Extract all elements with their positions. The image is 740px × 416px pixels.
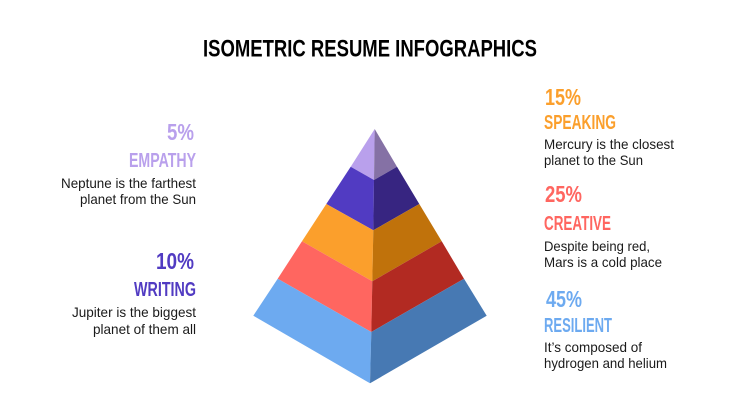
pyramid tier: creative xyxy=(278,241,464,332)
text block: writing 10%: planet of them all xyxy=(93,321,196,337)
pyramid tier: writing xyxy=(326,167,419,230)
text block: empathy 5% xyxy=(61,119,196,207)
text block: writing 10%: WRITING xyxy=(134,279,196,301)
text block: empathy 5%: Neptune is the farthest xyxy=(61,175,196,191)
text block: speaking 15%: Mercury is the closest xyxy=(544,136,674,152)
text block: writing 10%: 10% xyxy=(156,248,194,274)
pyramid tier: speaking xyxy=(302,204,442,281)
text block: creative 25%: 25% xyxy=(545,181,582,207)
text block: creative 25%: Despite being red, xyxy=(544,238,650,254)
text block: creative 25% xyxy=(544,181,662,270)
text block: creative 25%: Mars is a cold place xyxy=(544,254,662,270)
text block: writing 10%: Jupiter is the biggest xyxy=(72,304,196,320)
text block: resilient 45%: RESILIENT xyxy=(544,315,612,337)
text block: resilient 45%: 45% xyxy=(546,286,582,312)
text block: creative 25%: CREATIVE xyxy=(544,213,611,235)
text block: speaking 15% xyxy=(544,84,674,168)
pyramid tier: resilient xyxy=(253,279,487,383)
text block: writing 10% xyxy=(72,248,196,337)
text block: empathy 5%: planet from the Sun xyxy=(80,191,196,207)
text block: speaking 15%: planet to the Sun xyxy=(544,152,643,168)
text block: empathy 5%: 5% xyxy=(167,119,194,145)
text block: empathy 5%: EMPATHY xyxy=(129,150,196,172)
text block: speaking 15%: 15% xyxy=(545,84,581,110)
text block: resilient 45%: hydrogen and helium xyxy=(544,355,667,371)
pyramid tier: empathy xyxy=(351,129,397,180)
text block: resilient 45% xyxy=(544,286,667,371)
title: ISOMETRIC RESUME INFOGRAPHICS xyxy=(203,36,537,62)
pyramid chart xyxy=(253,129,487,383)
text block: resilient 45%: It’s composed of xyxy=(544,339,642,355)
text block: speaking 15%: SPEAKING xyxy=(544,112,616,134)
